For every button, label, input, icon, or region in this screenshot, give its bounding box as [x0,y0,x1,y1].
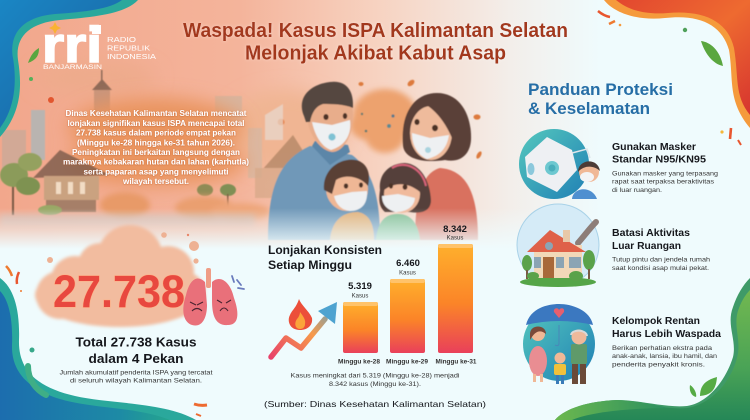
text: batasi aktivitas: Batasi Aktivitas [612,228,690,239]
bar: Minggu ke-28 [338,281,381,366]
temple and tower silhouette [255,104,312,198]
icon: rising arrow with flame [271,299,337,357]
total cases text [60,334,213,384]
source note: (Sumber: Dinas Kesehatan Kalimantan Selatan) [264,399,486,409]
intro paragraph: Peningkatan ini berkaitan langsung dengan [72,148,240,157]
blue wave top-left [0,0,138,137]
text: batasi aktivitas [612,228,711,272]
intro paragraph: wilayah tersebut. [122,177,189,186]
bar: Minggu ke-31: Kasus [447,236,463,242]
bar: Minggu ke-29: Minggu ke-29 [386,360,429,366]
chart caption [290,372,460,388]
guide item: N95 mask [519,129,718,199]
text: kelompok rentan: Kelompok Rentan [612,316,700,327]
text: kelompok rentan: anak-anak, lansia, ibu hamil, dan [612,353,717,360]
text: batasi aktivitas: saat kondisi asap mulai pekat. [612,265,709,272]
icon: house in glass dome [517,204,599,287]
mother [403,93,478,240]
icon: stilt house [33,150,110,212]
illustration: family wearing masks [255,79,483,240]
text: masker: rapat saat terpaksa beraktivitas [612,178,714,186]
logo: RRI Banjarmasin: INDONESIA [107,52,156,61]
total cases text: dalam 4 Pekan [88,351,184,366]
total cases text: Jumlah akumulatif penderita ISPA yang tercatat [60,370,213,376]
intro paragraph [63,109,249,186]
fade beneath scene and family [0,208,750,256]
text: masker: di luar ruangan. [612,187,662,194]
guide item: vulnerable groups [523,304,721,384]
cloud with number 27.738 [35,225,205,327]
text: masker: Gunakan masker yang terpasang [612,170,718,178]
icon: tower [92,70,112,114]
logo: RRI Banjarmasin: REPUBLIK [107,44,150,52]
bar: Minggu ke-29 [386,258,429,366]
bar: Minggu ke-31 [436,224,477,366]
text: kelompok rentan: Berikan perhatian ekstra pada [612,345,713,352]
icon: family under umbrella [523,304,595,384]
orange smoke behind text [66,98,246,186]
bar chart [338,224,477,366]
title: Waspada! Kasus ISPA Kalimantan Selatan [183,19,568,42]
title: Melonjak Akibat Kabut Asap [245,42,506,64]
number 27.738: 27.738 [53,266,185,317]
icon: sad lungs [183,268,244,326]
title [183,19,568,64]
bar chart heading [268,243,382,272]
text: kelompok rentan [612,316,721,368]
logo: RRI Banjarmasin: rri [42,17,102,73]
bar: Minggu ke-28: 5.319 [348,281,372,292]
green wave bottom-right [555,278,750,420]
logo: RRI Banjarmasin: RADIO [107,35,136,44]
logo: RRI Banjarmasin: BANJARMASIN [43,64,102,71]
bar: Minggu ke-29: Kasus [399,270,416,276]
guide item: limit outdoor activity [517,204,711,287]
bar: Minggu ke-31: 8.342 [443,224,467,235]
logo: RRI Banjarmasin [42,17,156,73]
total cases text: Total 27.738 Kasus [76,334,196,350]
bar: Minggu ke-31: Minggu ke-31 [436,360,477,366]
boy [324,160,374,240]
blue wave bottom-left [0,278,196,420]
father [268,82,380,240]
smoke cloud with particles [278,79,483,159]
lower smoke band [100,192,270,221]
guide heading [528,81,673,118]
text: batasi aktivitas: Luar Ruangan [612,241,681,252]
intro paragraph: (Minggu ke-28 hingga ke-31 tahun 2026). [77,138,235,148]
chart caption: Kasus meningkat dari 5.319 (Minggu ke-28) menjadi [290,372,460,380]
text: masker [612,142,718,194]
intro paragraph: serta paparan asap yang menyelimuti [84,168,229,176]
total cases text: di seluruh wilayah Kalimantan Selatan. [70,378,202,384]
text: kelompok rentan: penderita penyakit kronis. [612,362,705,368]
text: masker: Standar N95/KN95 [612,154,706,166]
intro paragraph: maraknya kebakaran hutan dan lahan (karhutla) [63,158,249,166]
chart caption: 8.342 kasus (Minggu ke-31). [329,381,421,388]
intro paragraph: 27.738 kasus dalam periode empat pekan [76,128,236,138]
intro paragraph: Dinas Kesehatan Kalimantan Selatan mencatat [66,109,247,118]
smoky city scene background [0,0,750,255]
bar: Minggu ke-28: Minggu ke-28 [338,360,381,366]
bar: Minggu ke-29: 6.460 [396,258,420,269]
girl [376,163,431,240]
bar: Minggu ke-28: Kasus [352,294,368,300]
icon: mask and boy [519,129,600,199]
orange wave top-right [604,0,750,128]
text: kelompok rentan: Harus Lebih Waspada [612,329,721,340]
icon: city buildings [2,96,262,180]
text: batasi aktivitas: Tutup pintu dan jendela rumah [612,256,711,264]
bar chart heading: Lonjakan Konsisten [268,243,382,257]
bar chart heading: Setiap Minggu [268,258,352,272]
guide heading: Panduan Proteksi [528,81,673,99]
intro paragraph: lonjakan signifikan kasus ISPA mencapai total [68,119,244,128]
icon: green trees [0,153,236,215]
text: masker: Gunakan Masker [612,142,696,153]
guide heading: & Keselamatan [528,100,650,118]
